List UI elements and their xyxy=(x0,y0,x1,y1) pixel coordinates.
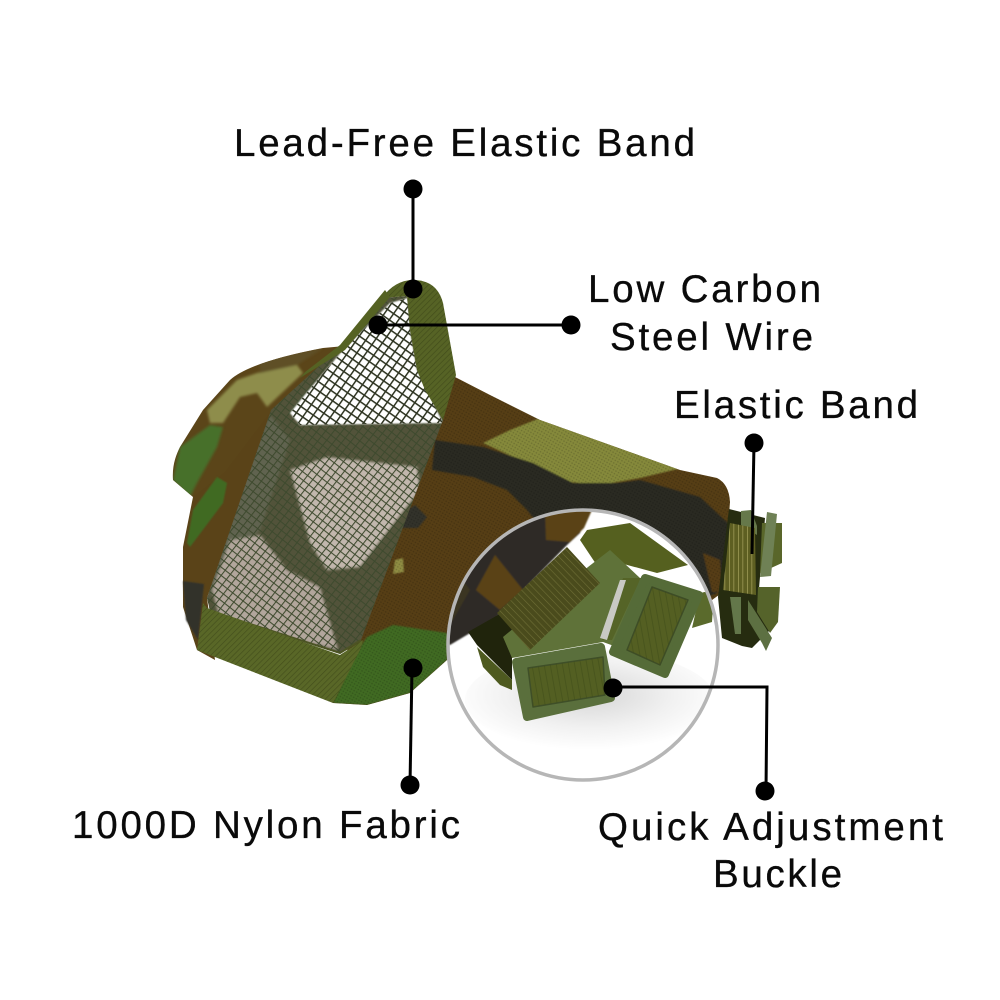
left side flap xyxy=(173,346,345,500)
bottom binding strip xyxy=(197,603,363,703)
leader line xyxy=(744,434,764,554)
leader line xyxy=(368,316,580,334)
left cheek fabric xyxy=(183,410,272,660)
lower buckle xyxy=(516,647,611,717)
label: Low Carbon xyxy=(588,268,821,311)
label xyxy=(598,806,943,896)
inset ring xyxy=(448,510,718,780)
callout: low carbon steel wire xyxy=(368,268,821,359)
label: Elastic Band xyxy=(674,384,918,427)
rear strap and side buckle xyxy=(718,509,782,651)
upper buckle xyxy=(613,578,699,674)
silver bar and small strap xyxy=(600,578,641,640)
label: Quick Adjustment xyxy=(598,806,943,849)
inset floor shadow xyxy=(485,654,696,738)
inset camouflage fabric xyxy=(450,512,592,646)
callout: elastic band xyxy=(674,384,918,554)
label: 1000D Nylon Fabric xyxy=(72,804,460,847)
label: Buckle xyxy=(713,853,842,896)
label: Lead-Free Elastic Band xyxy=(234,122,695,165)
inset lower strap xyxy=(468,614,512,690)
magnified circular inset: quick adjustment buckle xyxy=(440,500,718,780)
callout: quick adjustment buckle xyxy=(598,678,943,896)
callout: 1000D nylon fabric xyxy=(72,658,460,847)
label: Steel Wire xyxy=(610,316,813,359)
leader line xyxy=(604,678,774,800)
webbing keeper xyxy=(497,547,600,650)
buckle plate xyxy=(503,550,640,658)
nose binding strip xyxy=(300,280,456,420)
leader line xyxy=(400,658,422,794)
callout: lead-free elastic band xyxy=(234,122,695,298)
right cheek camouflage fabric xyxy=(333,374,730,705)
label xyxy=(588,268,821,359)
leader line xyxy=(404,180,422,298)
wire mesh panel xyxy=(200,290,450,660)
back strap xyxy=(580,523,714,628)
product photo: camouflage mesh half face mask xyxy=(173,280,782,705)
